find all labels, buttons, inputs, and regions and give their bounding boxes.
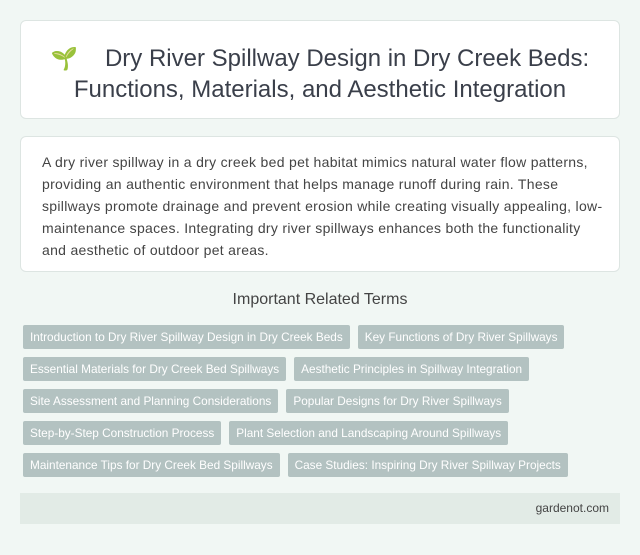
related terms tags: Site Assessment and Planning Considerations bbox=[30, 394, 271, 408]
related terms tags: Maintenance Tips for Dry Creek Bed Spillways bbox=[30, 458, 273, 472]
related terms tags: Essential Materials for Dry Creek Bed Spillways bbox=[30, 362, 279, 376]
related terms tags bbox=[23, 325, 568, 477]
related terms tags: Aesthetic Principles in Spillway Integration bbox=[301, 362, 522, 376]
footer credit: gardenot.com bbox=[536, 501, 609, 515]
title: Functions, Materials, and Aesthetic Integration bbox=[74, 76, 566, 103]
related terms tags: Introduction to Dry River Spillway Design in Dry Creek Beds bbox=[30, 330, 343, 344]
related terms tags: Case Studies: Inspiring Dry River Spillway Projects bbox=[295, 458, 561, 472]
related terms tags: Plant Selection and Landscaping Around Spillways bbox=[236, 426, 501, 440]
section heading: Important Related Terms bbox=[233, 291, 407, 308]
related terms tags: Key Functions of Dry River Spillways bbox=[365, 330, 557, 344]
description panel bbox=[20, 136, 620, 272]
title bbox=[51, 45, 589, 103]
related terms tags: Step-by-Step Construction Process bbox=[30, 426, 214, 440]
related terms tags: Popular Designs for Dry River Spillways bbox=[293, 394, 502, 408]
description text: A dry river spillway in a dry creek bed pet habitat mimics natural water flow patterns, providing an authentic environment that helps manage runoff during rain. These spillways promote drainage and prevent erosion while creating visually appealing, low-maintenance spaces. Integrating dry river spillways enhances both the functionality and aesthetic of outdoor pet areas. bbox=[42, 154, 602, 258]
footer bbox=[20, 493, 620, 524]
title panel bbox=[20, 20, 620, 119]
title: 🌱 Dry River Spillway Design in Dry Creek Beds: bbox=[51, 45, 589, 72]
